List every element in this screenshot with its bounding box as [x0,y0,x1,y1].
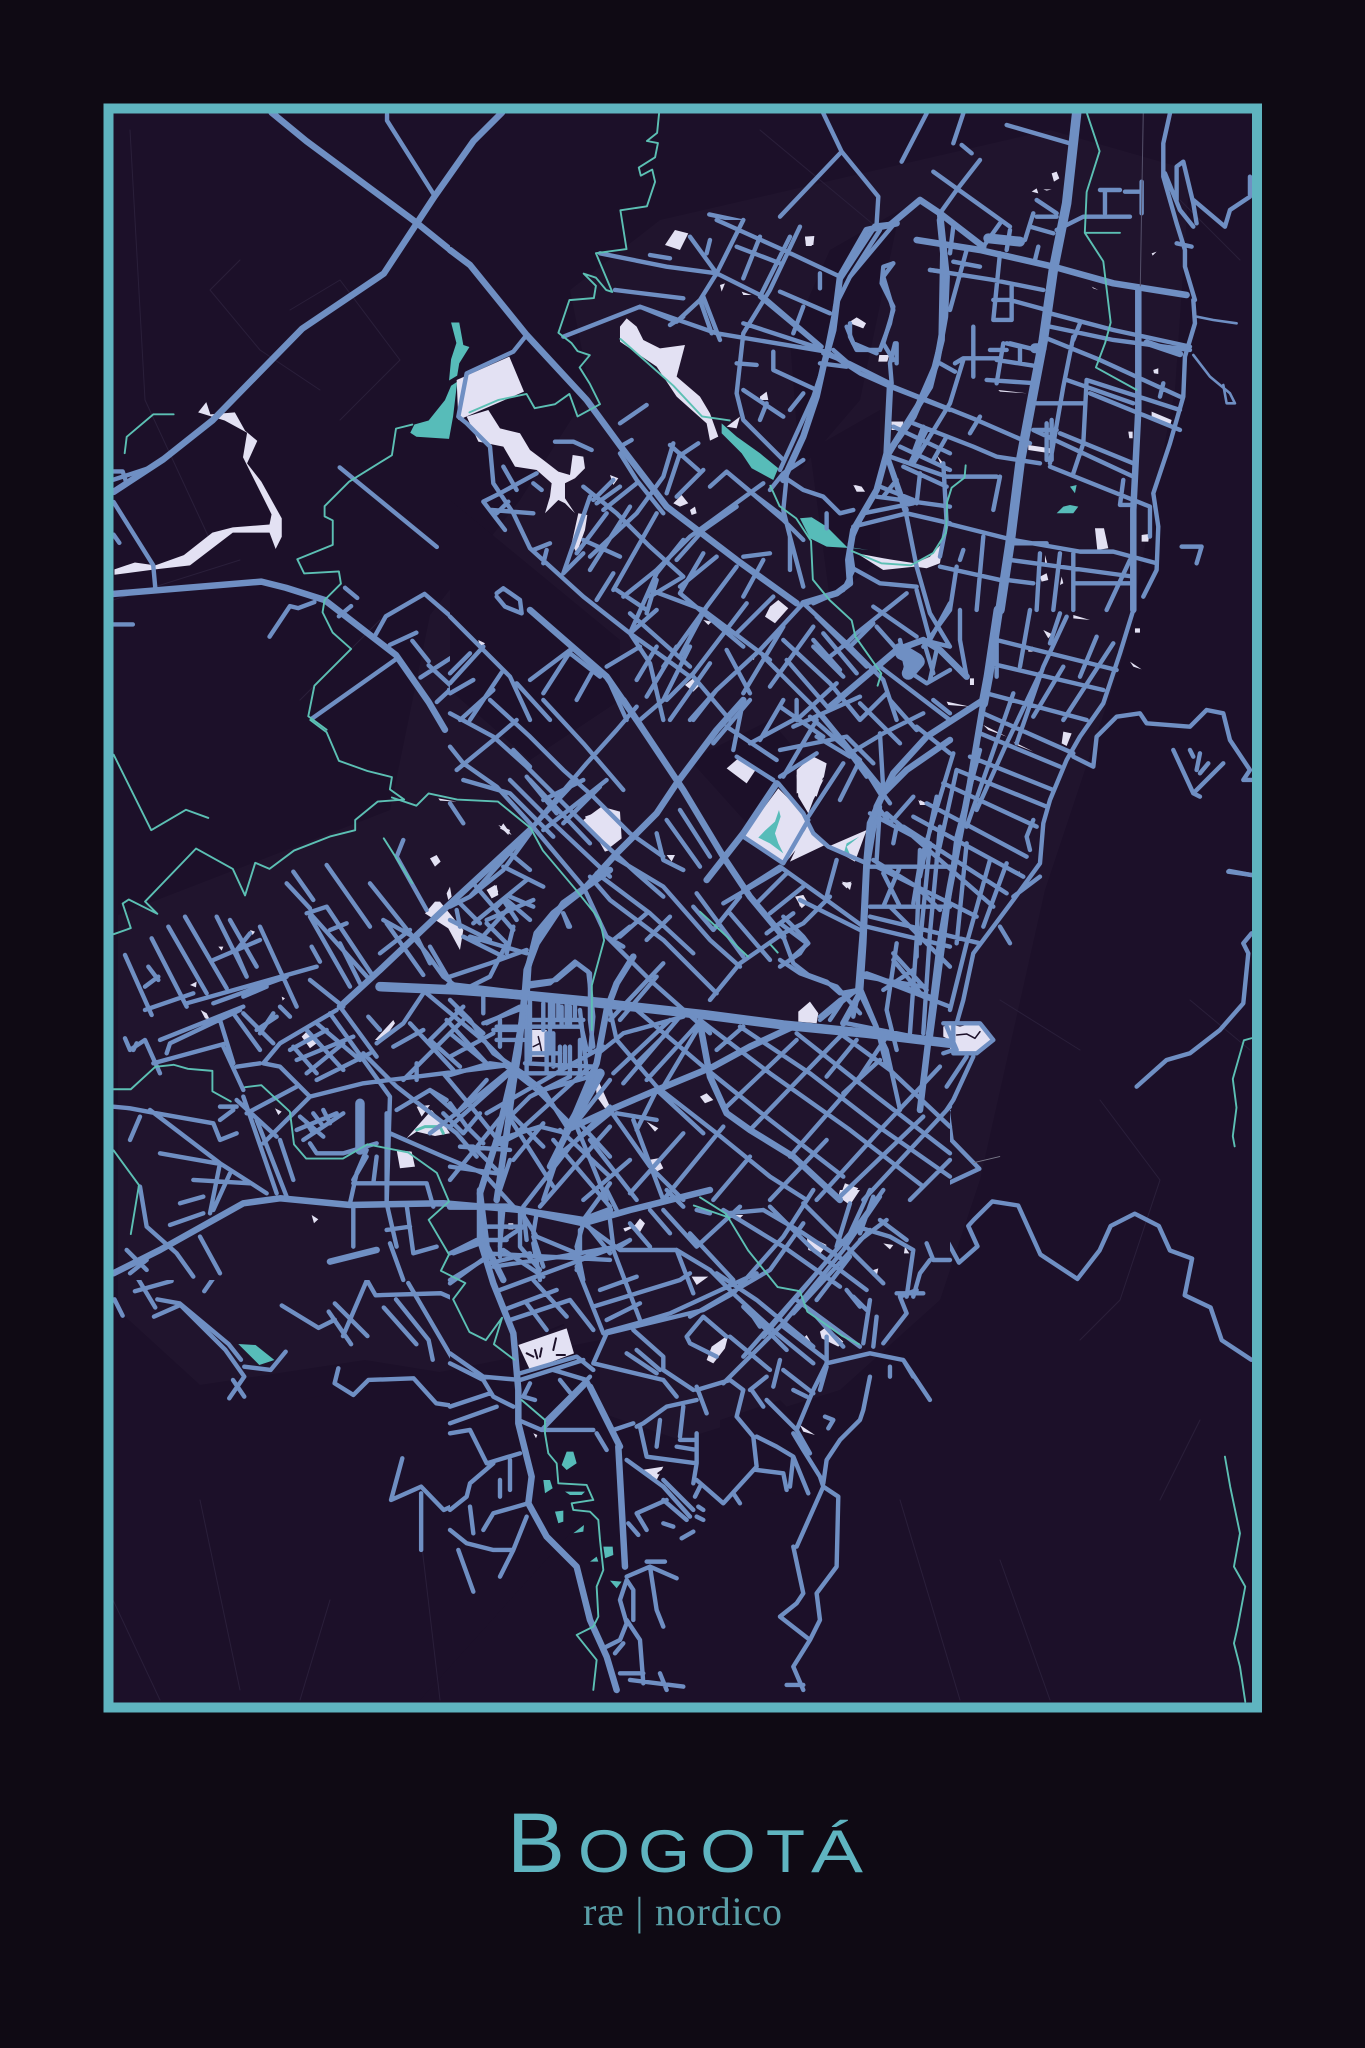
parks and wetlands [114,172,1172,1588]
streets [113,112,1252,1690]
streets: south-east quadrant [950,1110,1252,1362]
faint minor tracks [113,130,1250,1700]
title: O [700,1818,756,1885]
title: G [638,1818,690,1885]
parks: east [795,615,1142,1055]
streets: south detail [450,1190,950,1690]
rivers: south [522,1400,603,1690]
rivers: south-east quadrant [700,912,1251,1344]
streets: central detail [450,700,950,1200]
title [507,1796,863,1890]
parks: north-west quadrant [114,323,469,575]
title: T [766,1818,805,1885]
dark open land inside the city [113,210,900,1700]
river: far south-east [1225,1457,1245,1702]
streets: north-central detail [450,220,950,720]
streets: east detail [780,610,1252,1110]
rivers: south-west quadrant [114,720,730,1360]
parks: north-east [805,172,1172,585]
title: Á [811,1818,863,1885]
urban footprint [118,130,1190,1440]
rivers: north-east quadrant [770,112,1143,686]
parks: central park [487,757,950,1200]
title: B [507,1796,565,1890]
streets: eastern hills and edge [1229,871,1251,875]
rivers: north-west quadrant [125,112,730,730]
streets: south [154,1305,463,1550]
parks: north-central [457,230,943,692]
map frame [108,108,1257,1708]
pond: south-west [238,1344,274,1365]
subtitle: ræ | nordico [583,1889,782,1934]
rivers [114,112,1251,1702]
streets: north-east detail [780,113,1250,610]
map panel [108,108,1257,1708]
streets: south-west quadrant [114,1280,450,1362]
parks: west [190,798,610,1228]
older coarse streets outside the detail windows [114,112,1251,1550]
streets: north-west quadrant [114,114,505,733]
title: O [578,1818,630,1885]
parks and ponds: south [508,1190,909,1588]
streets: west detail [113,780,610,1280]
streets: north-east quadrant [707,212,746,220]
